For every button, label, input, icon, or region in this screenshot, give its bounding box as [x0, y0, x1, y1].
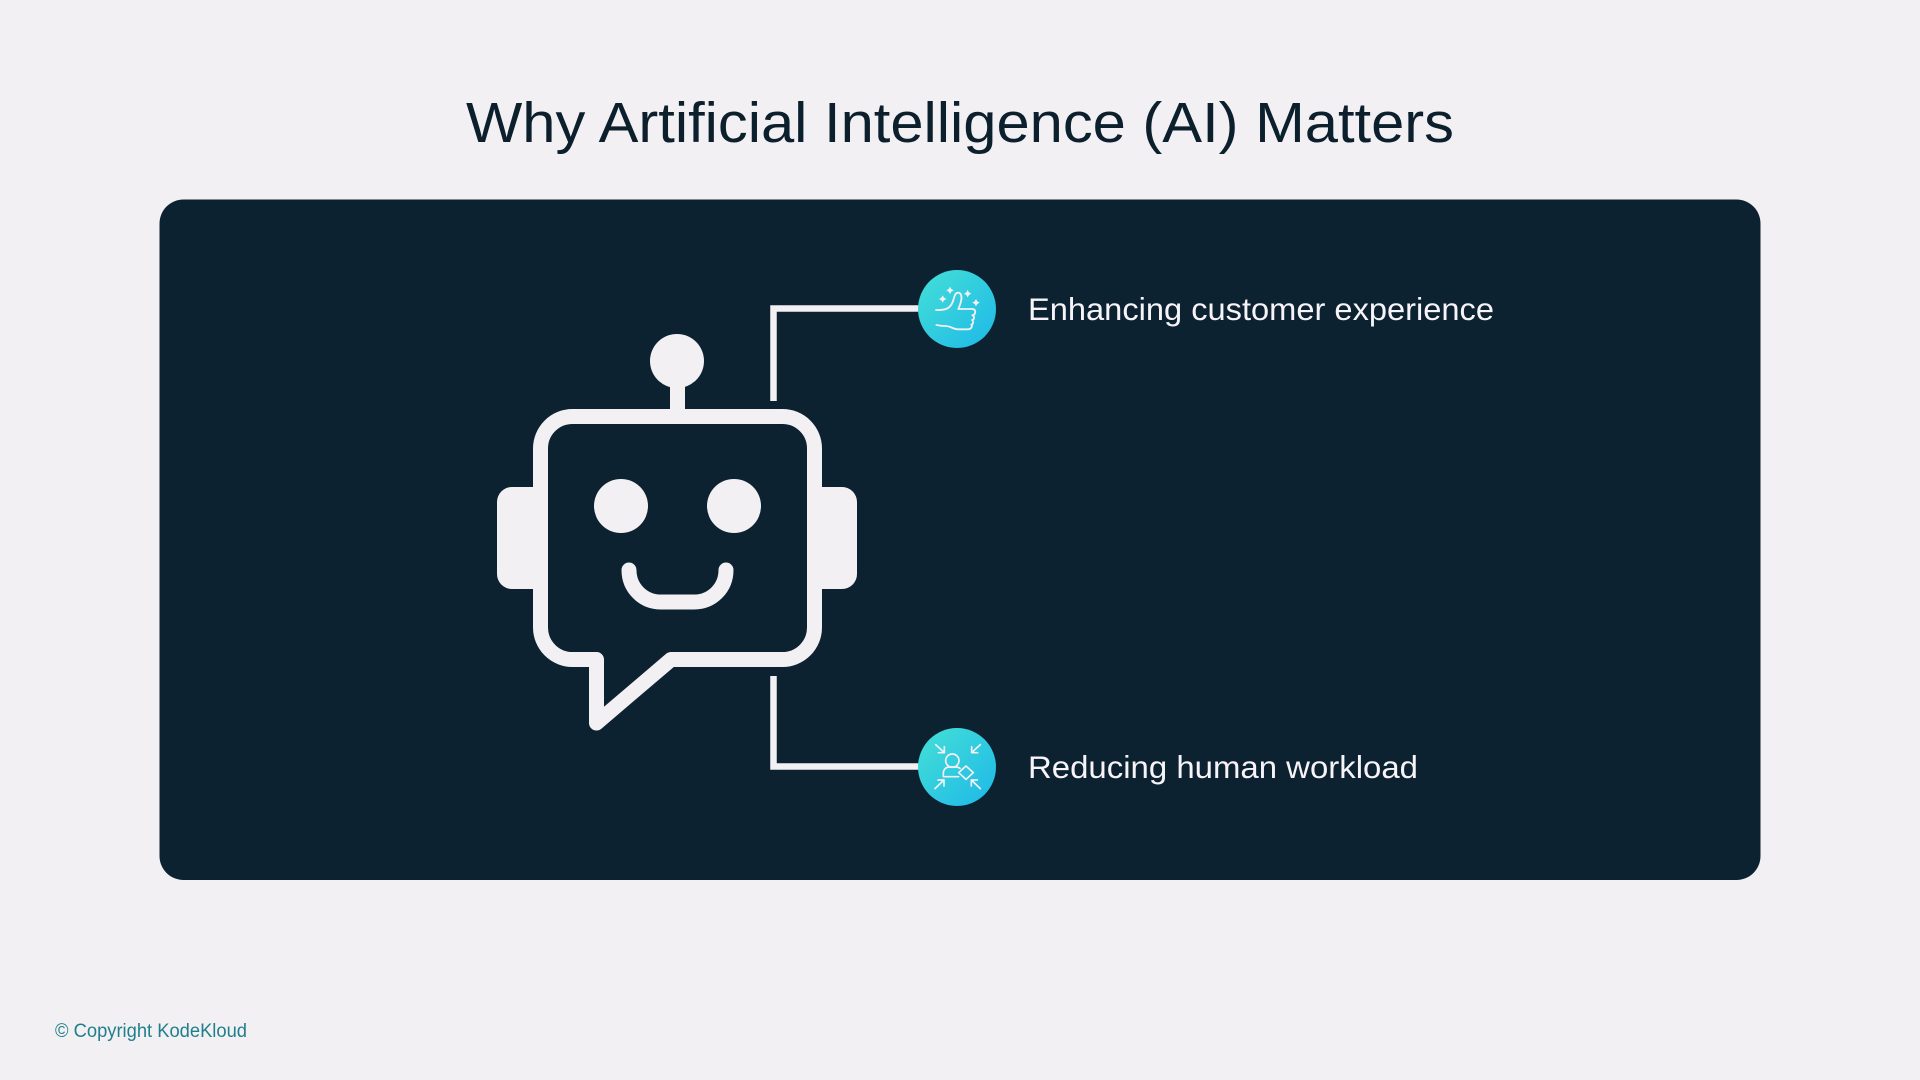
- robot antenna: [650, 334, 704, 414]
- icon: thumbs up badge: [918, 270, 996, 348]
- robot eyes: [594, 479, 761, 533]
- title: Why Artificial Intelligence (AI) Matters: [466, 91, 1454, 155]
- connector: robot to top item: [774, 308, 925, 401]
- text: top item: Enhancing customer experience: [1028, 291, 1494, 327]
- text: bottom item: Reducing human workload: [1028, 749, 1418, 785]
- footer copyright: © Copyright KodeKloud: [55, 1021, 247, 1042]
- connector: robot to bottom item: [774, 676, 925, 766]
- robot smile: [629, 570, 726, 602]
- icon: robot chatbot: [497, 334, 857, 723]
- robot ears: [497, 487, 857, 589]
- icon: workload badge: [918, 728, 996, 806]
- panel: dark card: [160, 200, 1760, 880]
- robot speech bubble head: [540, 416, 814, 723]
